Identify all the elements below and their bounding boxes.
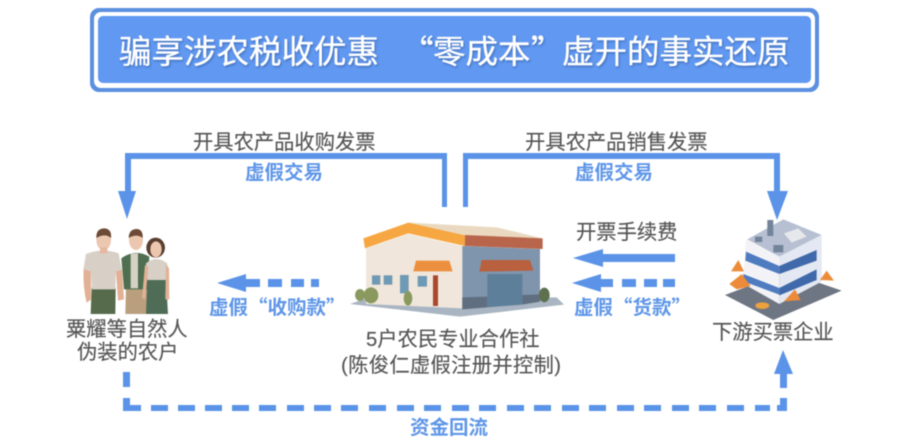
label: cooperative: (陈俊仁虚假注册并控制) (341, 354, 561, 377)
label: funds returning: 资金回流 (410, 411, 489, 440)
red fascia (465, 235, 543, 249)
trees (729, 260, 834, 301)
orange awning left (413, 261, 453, 271)
man middle (121, 229, 149, 314)
man left (83, 228, 124, 314)
icon: farmers group (83, 228, 169, 314)
yellow car (755, 302, 769, 309)
label: sales invoice: 开具农产品销售发票 (525, 131, 708, 154)
roof top (408, 223, 543, 238)
label: farmers: 粟耀等自然人 (66, 318, 188, 341)
icon: downstream company building (725, 219, 842, 320)
label: fake transaction left: 虚假交易 (245, 156, 323, 185)
arrow: fake purchase payment (217, 274, 319, 292)
title text: 骗享涉农税收优惠 (119, 26, 379, 73)
label: farmers (66, 318, 188, 364)
arrow: fake goods payment (572, 274, 675, 292)
label: fake transaction right: 虚假交易 (575, 156, 653, 185)
title text: ” (531, 26, 564, 73)
label: purchase invoice: 开具农产品收购发票 (193, 131, 376, 154)
shrubs (355, 287, 550, 306)
label: cooperative: 5户农民专业合作社 (366, 328, 540, 351)
orange roof edge (363, 223, 465, 248)
arrow: invoicing fee (573, 249, 675, 267)
roof equipment (755, 220, 783, 252)
right wall (462, 246, 540, 309)
arrow: sales invoice to downstream firm (463, 153, 788, 220)
label: fake purchase payment: 虚假“收购款” (209, 291, 346, 320)
roof (747, 219, 822, 257)
title banner (90, 8, 819, 92)
woman right (142, 238, 169, 314)
label: cooperative (341, 328, 561, 377)
title text: 零成本 (433, 26, 531, 73)
label: invoicing fee: 开票手续费 (576, 221, 677, 244)
icon: cooperative warehouse (350, 223, 564, 317)
ground (725, 272, 842, 320)
window bands (743, 252, 779, 295)
title text: 虚开的事实还原 (562, 26, 790, 73)
label: downstream company: 下游买票企业 (712, 321, 834, 344)
arrow: funds returning (123, 350, 793, 411)
dark base on right wall (462, 294, 540, 309)
right wall (779, 235, 822, 304)
left wall (743, 239, 779, 304)
ground (350, 297, 564, 317)
windows and door (372, 275, 427, 293)
left wall (366, 234, 462, 308)
red awning right (479, 260, 533, 272)
label: farmers: 伪装的农户 (77, 341, 178, 364)
label: fake goods payment: 虚假“货款” (574, 291, 691, 320)
shutter door (487, 274, 522, 307)
title text: “ (401, 26, 434, 73)
arrow: purchase invoice to farmers (118, 153, 447, 219)
